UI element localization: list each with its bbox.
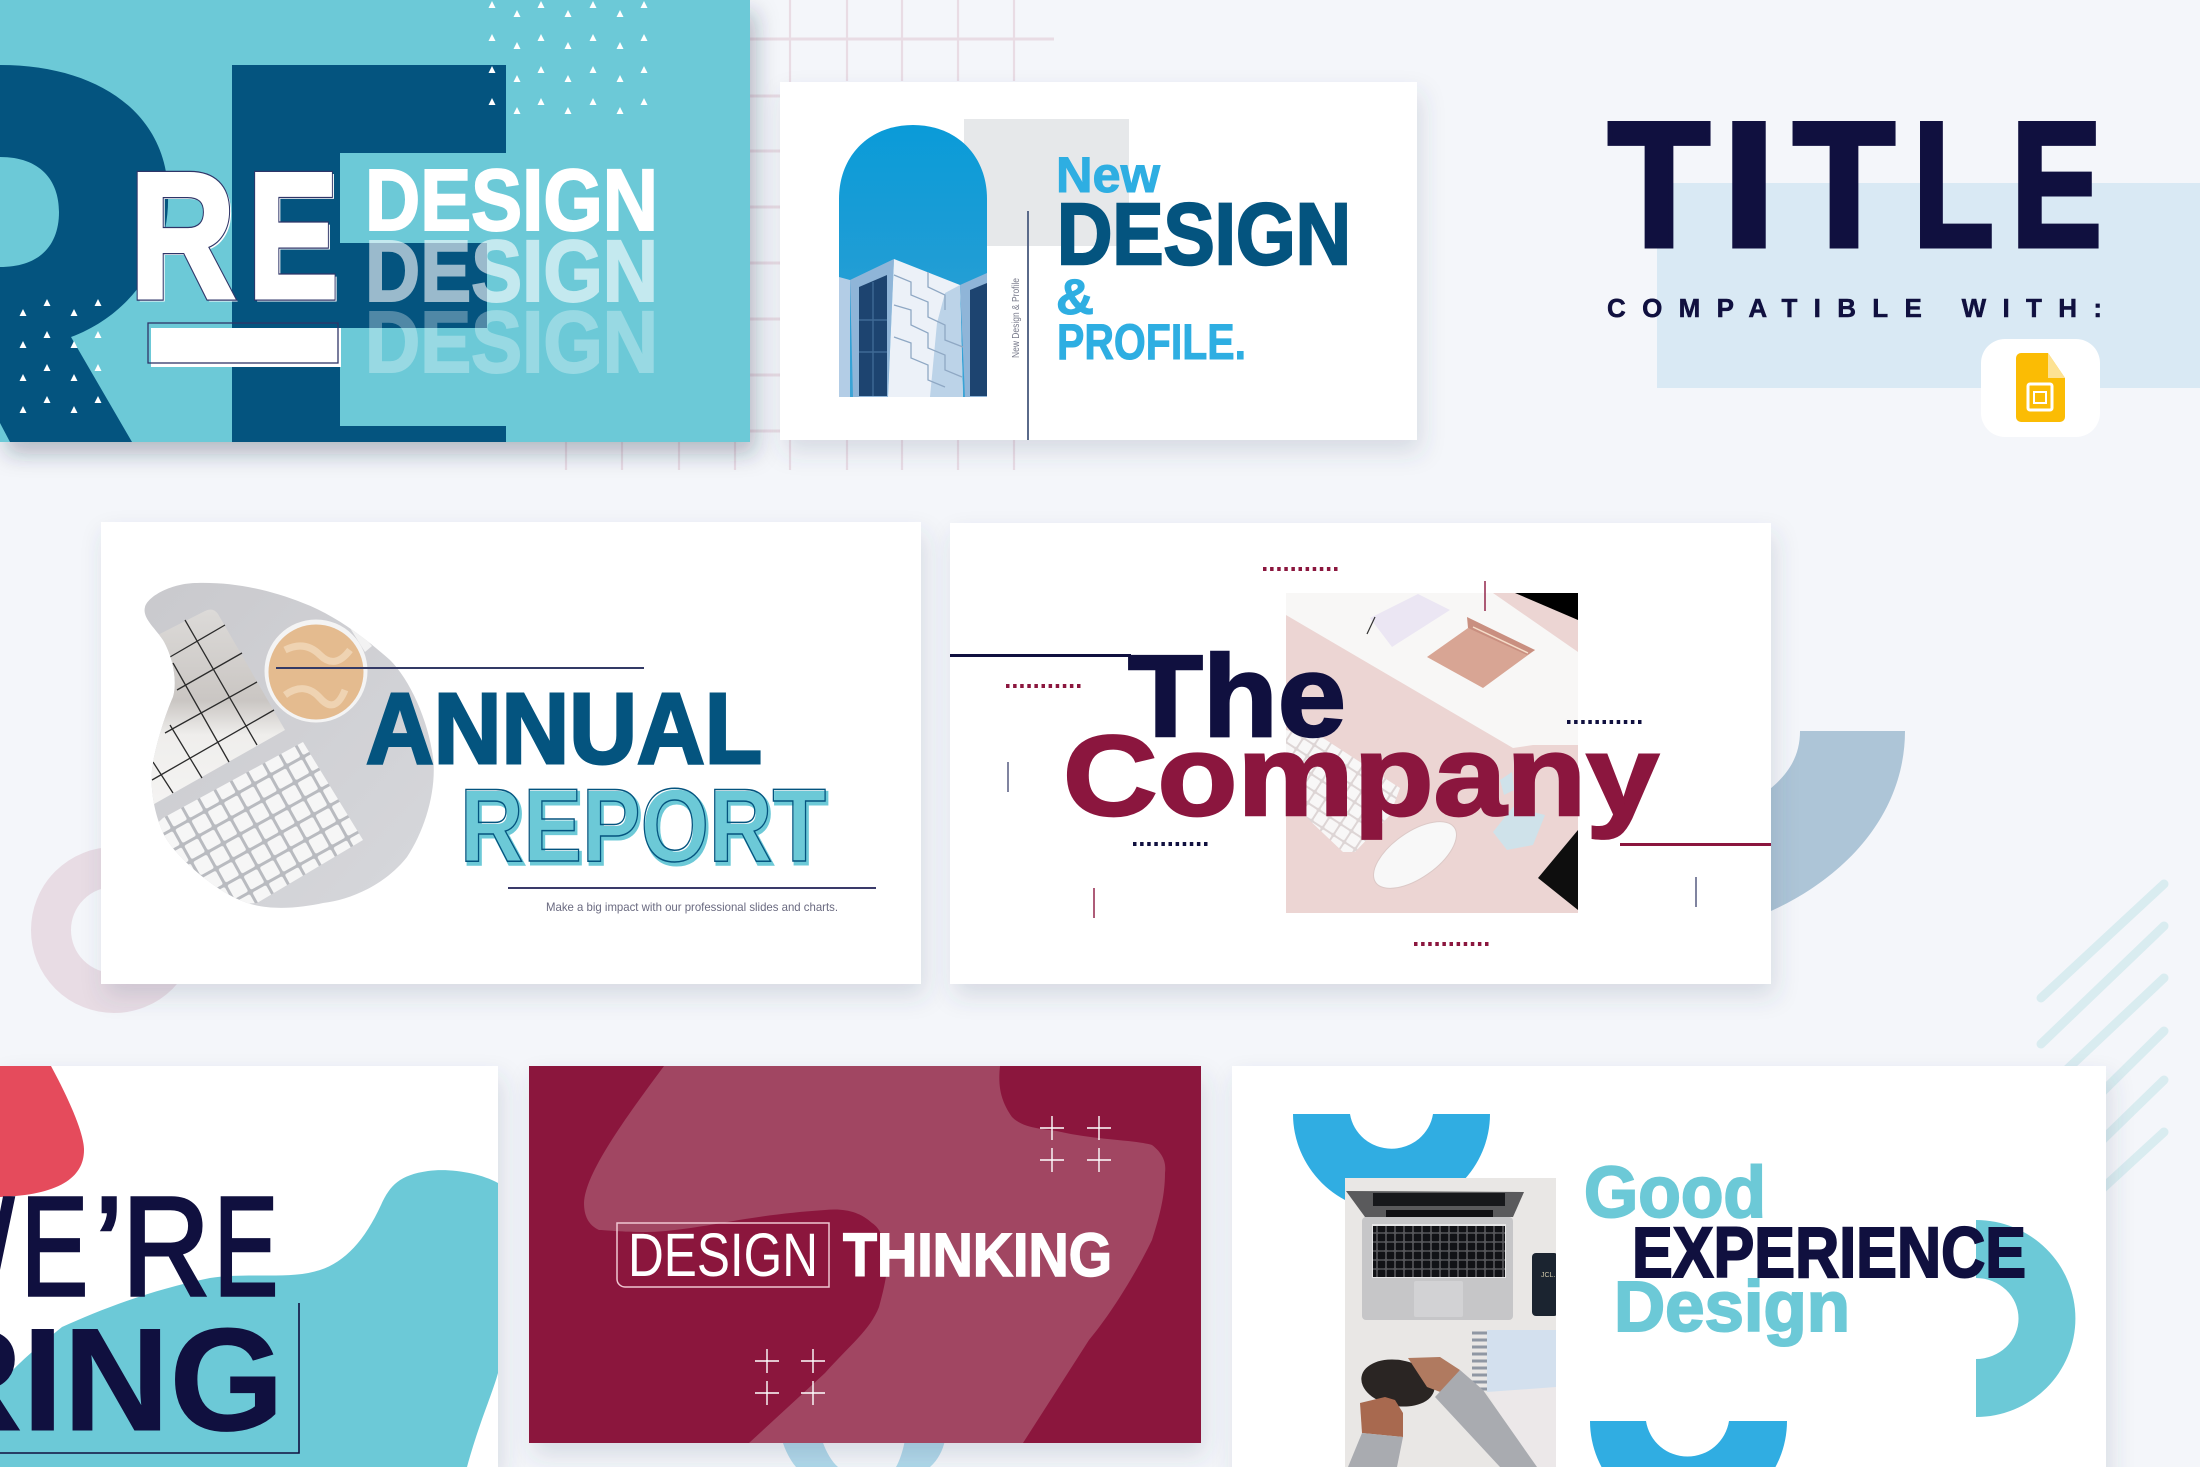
lighter blob <box>584 1066 1165 1443</box>
panel: we're hiring slide <box>0 1066 498 1467</box>
heading: design: Design <box>1614 1268 1850 1347</box>
heading: RE: R <box>130 136 235 335</box>
heading: thinking: THINKING <box>843 1221 1112 1289</box>
title <box>1608 85 2102 284</box>
panel: annual report slide <box>101 522 921 984</box>
dotted accents <box>1006 569 1644 944</box>
heading: New Design & Profile <box>1056 147 1351 370</box>
heading: RE <box>130 136 340 337</box>
grey square <box>964 119 1129 246</box>
heading: New Design & Profile: DESIGN <box>1057 186 1351 283</box>
heading: RE: E <box>248 136 338 335</box>
heading: DESIGN stack: DESIGN <box>365 152 658 249</box>
vertical caption: New Design & Profile <box>1011 278 1022 358</box>
photo: building in arch <box>839 125 987 397</box>
panel: the company slide <box>950 523 1771 984</box>
panel: redesign slide <box>0 0 750 442</box>
coffee cup <box>264 620 372 722</box>
vertical rule <box>1027 211 1029 440</box>
heading: design: DESIGN <box>628 1221 818 1289</box>
photo blob: desk with cup and keyboard <box>144 582 434 908</box>
heading: RE: E <box>250 138 340 337</box>
heading frame <box>0 1303 299 1453</box>
heading: DESIGN stack: DESIGN <box>365 223 658 320</box>
heading: we're: E <box>214 1167 278 1325</box>
heading: we're: E <box>21 1167 88 1325</box>
cyan half ring right <box>1976 1220 2075 1417</box>
heading: we're: ’ <box>95 1167 123 1325</box>
decorative blue ring below panel <box>782 1440 945 1467</box>
grid notebook <box>152 610 285 804</box>
heading: company: Company <box>1063 713 1659 840</box>
decorative diagonal stripes <box>2041 884 2164 1200</box>
heading: good: Good <box>1584 1153 1766 1233</box>
title: T <box>1608 85 1710 284</box>
panel: design thinking slide <box>529 1066 1201 1443</box>
blue half ring top <box>1293 1114 1490 1211</box>
big letter E backdrop <box>232 65 506 442</box>
cyan blob <box>0 1170 498 1467</box>
heading: we're <box>0 1196 276 1297</box>
heading: annual: ANNUAL <box>366 673 762 785</box>
rule above heading <box>276 667 644 669</box>
plus marks top right <box>1040 1116 1111 1172</box>
photo: pink desk <box>1286 593 1578 913</box>
decorative pink ring <box>51 867 177 993</box>
big letter R backdrop <box>0 65 168 442</box>
blue half ring bottom <box>1590 1421 1787 1467</box>
decorative blue arc <box>1755 731 1905 918</box>
heading: the: The <box>1128 631 1346 761</box>
title: T <box>1793 85 1895 284</box>
keyboard <box>150 742 363 905</box>
title: I <box>1722 85 1776 284</box>
triangle dots top right <box>488 1 648 114</box>
heading: report: REPORT <box>460 768 826 884</box>
design outline box <box>617 1223 829 1287</box>
triangle dots bottom left <box>20 299 102 413</box>
icon: google slides <box>1981 339 2100 437</box>
subtitle: compatible with: COMPATIBLE WITH: <box>1607 293 2102 323</box>
rule below heading <box>508 887 876 889</box>
heading: RE: R <box>130 136 235 335</box>
heading: New Design & Profile: New <box>1056 147 1160 203</box>
heading: DESIGN stack: DESIGN <box>365 294 658 391</box>
photo: laptop and hands <box>1345 1178 1558 1467</box>
heading: RE: R <box>132 138 237 337</box>
rule: top left <box>950 654 1131 657</box>
heading: we're: R <box>122 1167 210 1325</box>
heading: experience: EXPERIENCE <box>1632 1214 2026 1293</box>
heading: New Design & Profile: & <box>1056 269 1094 325</box>
plus marks bottom <box>755 1349 825 1405</box>
heading: New Design & Profile: PROFILE. <box>1057 314 1246 370</box>
panel: new design and profile slide <box>780 82 1417 440</box>
panel: good experience design slide <box>1232 1066 2106 1467</box>
title: L <box>1913 85 1994 284</box>
title: E <box>2011 85 2102 284</box>
rule: bottom right <box>1620 843 1771 846</box>
photo: laptop and hands: JCL. <box>1541 1272 1555 1279</box>
heading: RE: E <box>248 136 338 335</box>
red blob <box>0 1066 84 1197</box>
white bar <box>148 323 341 367</box>
tagline: Make a big impact with our professional slides and charts. <box>546 900 838 914</box>
heading: DESIGN stack <box>365 152 658 391</box>
title block backdrop <box>1657 183 2200 388</box>
heading: report: REPORT <box>462 771 828 887</box>
tick accents <box>1008 581 1696 918</box>
